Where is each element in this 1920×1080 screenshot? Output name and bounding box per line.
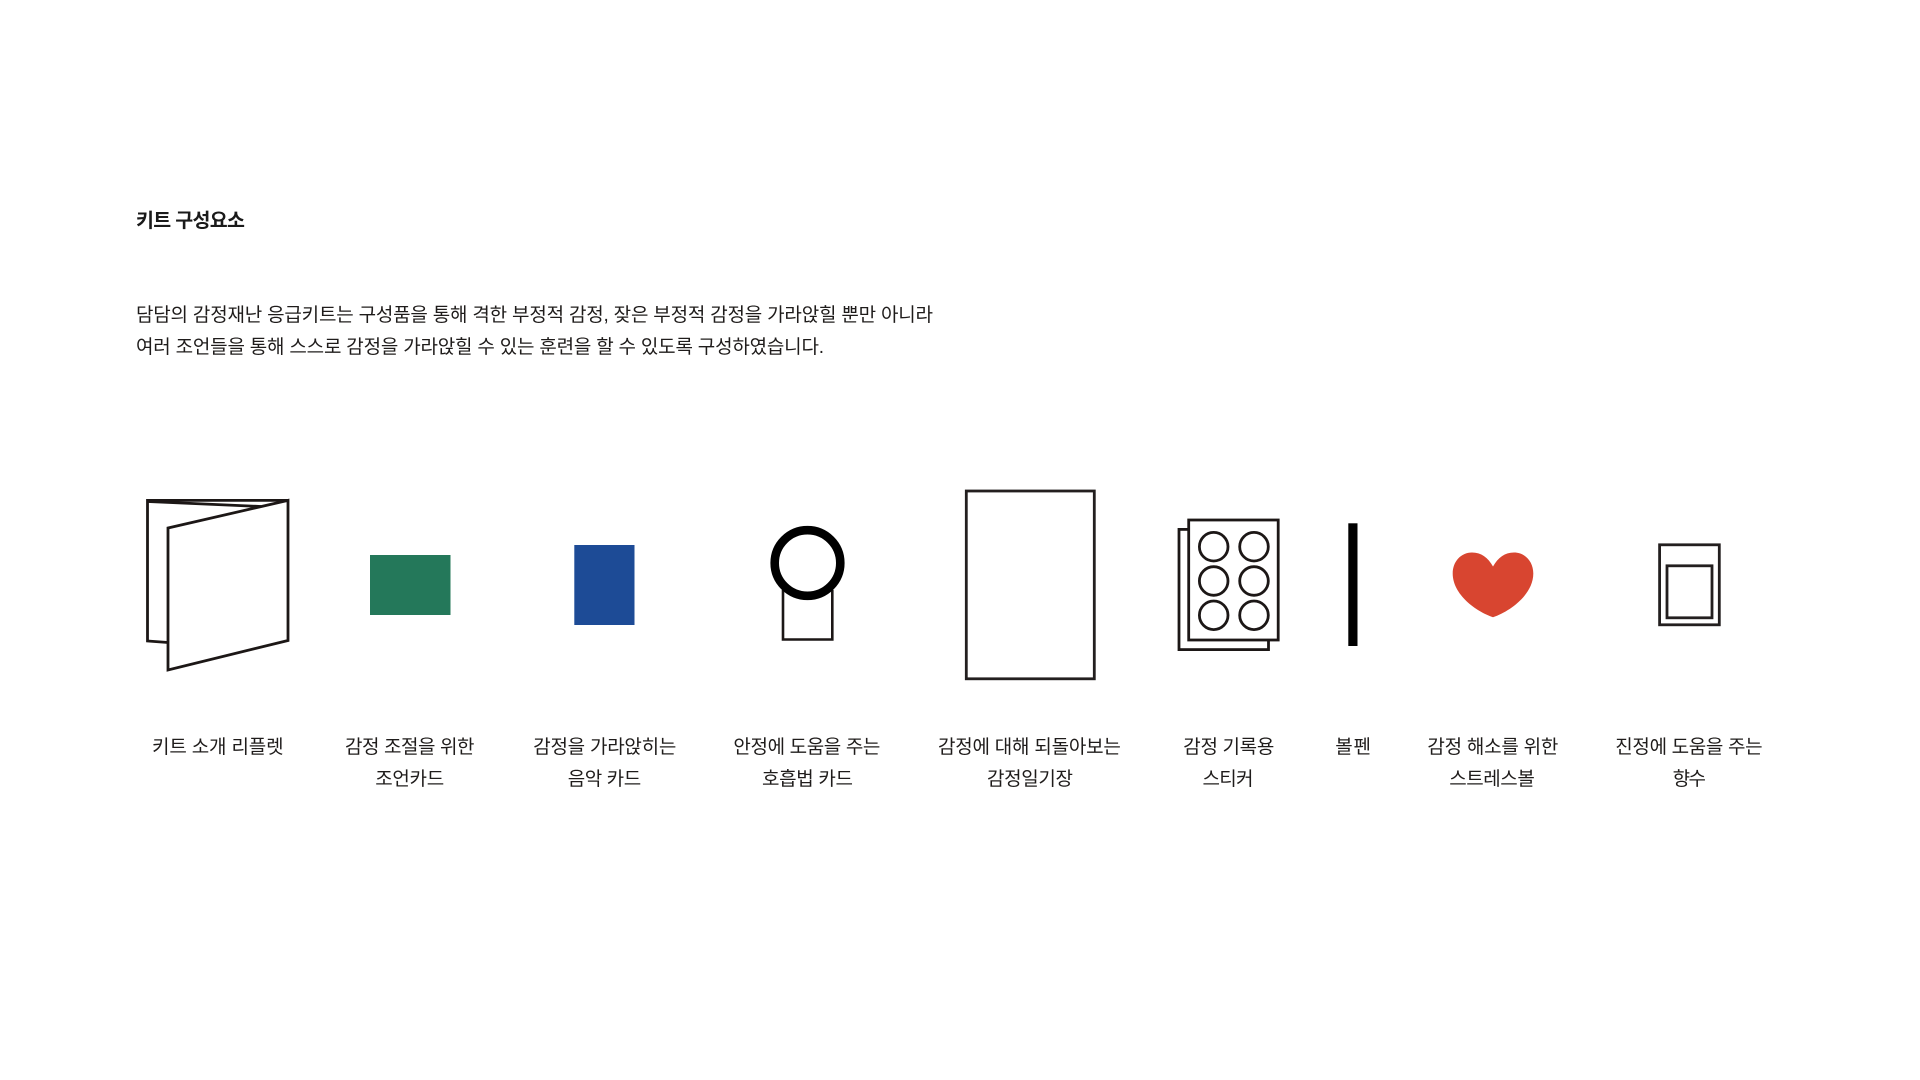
- label: stress ball: [1427, 736, 1558, 790]
- icon: ring card: [775, 530, 840, 640]
- label: perfume: 향수: [1673, 768, 1706, 790]
- label: emotion diary: [938, 736, 1121, 790]
- label: perfume: 진정에 도움을 주는: [1615, 736, 1763, 758]
- label: music card: 음악 카드: [568, 768, 641, 790]
- label: emotion diary: 감정일기장: [987, 768, 1073, 790]
- label: leaflet: 키트 소개 리플렛: [152, 736, 284, 758]
- text block: kit introduction: 여러 조언들을 통해 스스로 감정을 가라앉힐 수 있는 훈련을 할 수 있도록 구성하였습니다.: [136, 336, 824, 358]
- label: advice card: 감정 조절을 위한: [345, 736, 474, 758]
- icon: blue card: [574, 545, 634, 625]
- item: perfume: [1615, 545, 1763, 790]
- label: music card: [533, 736, 676, 790]
- label: music card: 감정을 가라앉히는: [533, 736, 676, 758]
- label: stickers: 스티커: [1202, 768, 1254, 790]
- icon: sticker sheets: [1179, 520, 1278, 650]
- icon: green card: [370, 555, 450, 615]
- icon: pen: [1348, 523, 1358, 646]
- label: stickers: 감정 기록용: [1183, 736, 1274, 758]
- label: stress ball: 감정 해소를 위한: [1427, 736, 1558, 758]
- label: advice card: [345, 736, 474, 790]
- label: breathing card: 호흡법 카드: [762, 768, 853, 790]
- label: emotion diary: 감정에 대해 되돌아보는: [938, 736, 1121, 758]
- item: ballpoint pen: [1335, 523, 1371, 758]
- label: breathing card: 안정에 도움을 주는: [733, 736, 880, 758]
- item: stress ball: [1427, 552, 1558, 790]
- icon: perfume bottle: [1660, 545, 1719, 625]
- item: stickers: [1179, 520, 1278, 790]
- label: stress ball: 스트레스볼: [1449, 768, 1535, 790]
- label: ballpoint pen: 볼펜: [1335, 736, 1371, 758]
- icon: diary: [966, 491, 1094, 679]
- text block: kit introduction: 담담의 감정재난 응급키트는 구성품을 통해 격한 부정적 감정, 잦은 부정적 감정을 가라앉힐 뿐만 아니라: [136, 304, 933, 326]
- label: perfume: [1615, 736, 1763, 790]
- item: breathing card: [733, 530, 880, 790]
- label: stickers: [1183, 736, 1274, 790]
- label: breathing card: [733, 736, 880, 790]
- item: leaflet: [148, 500, 288, 758]
- text block: kit introduction: [136, 304, 933, 358]
- icon: folded leaflet: [148, 500, 288, 670]
- item: advice card: [345, 555, 474, 790]
- heading: kit components: 키트 구성요소: [136, 210, 245, 232]
- icon: heart: [1453, 552, 1533, 617]
- item: music card: [533, 545, 676, 790]
- label: advice card: 조언카드: [375, 768, 444, 790]
- item: emotion diary: [938, 491, 1121, 790]
